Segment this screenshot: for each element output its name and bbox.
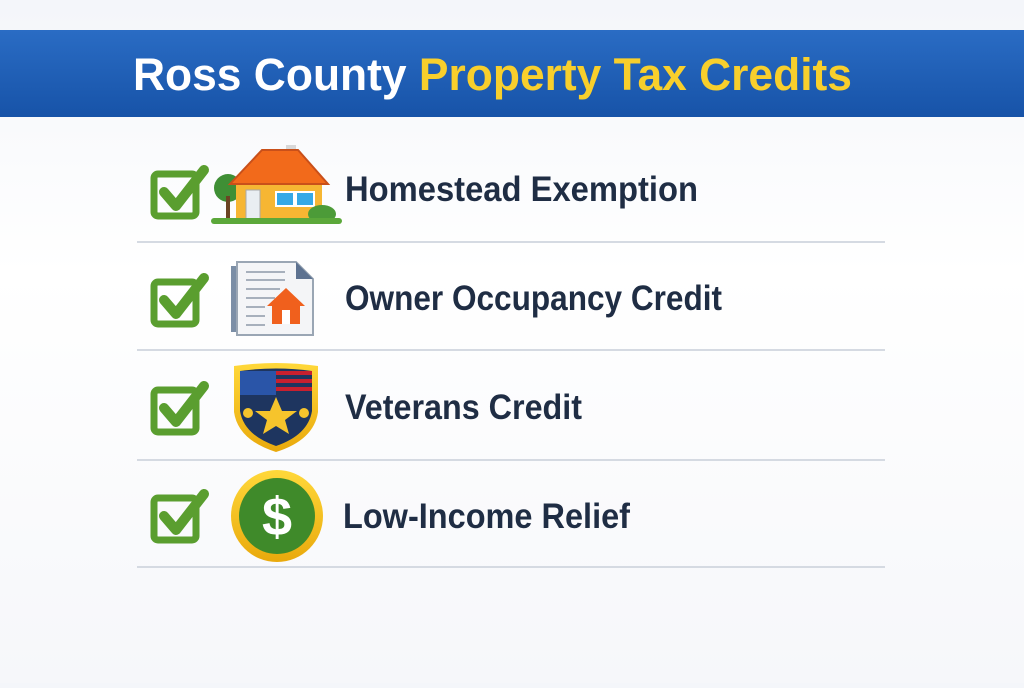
- row: low income: [154, 470, 630, 562]
- row: homestead: [154, 145, 698, 224]
- icon: dollar coin: $: [262, 487, 292, 547]
- icon: shield: [234, 363, 318, 452]
- icon: checkbox: [154, 386, 204, 432]
- title bar: [0, 30, 1024, 117]
- icon: checkbox: [154, 170, 204, 216]
- label: Homestead Exemption: [345, 170, 698, 209]
- icon: checkbox: [154, 494, 204, 540]
- label: Owner Occupancy Credit: [345, 279, 722, 318]
- icon: document: [231, 262, 313, 335]
- label: Veterans Credit: [345, 388, 582, 427]
- row: owner occupancy: [154, 262, 722, 335]
- label: Low-Income Relief: [343, 497, 630, 536]
- row: veterans: [154, 363, 582, 452]
- icon: house: [211, 145, 342, 224]
- icon: dollar coin: [231, 470, 323, 562]
- icon: checkbox: [154, 278, 204, 324]
- title: Ross County Property Tax Credits: [133, 49, 852, 100]
